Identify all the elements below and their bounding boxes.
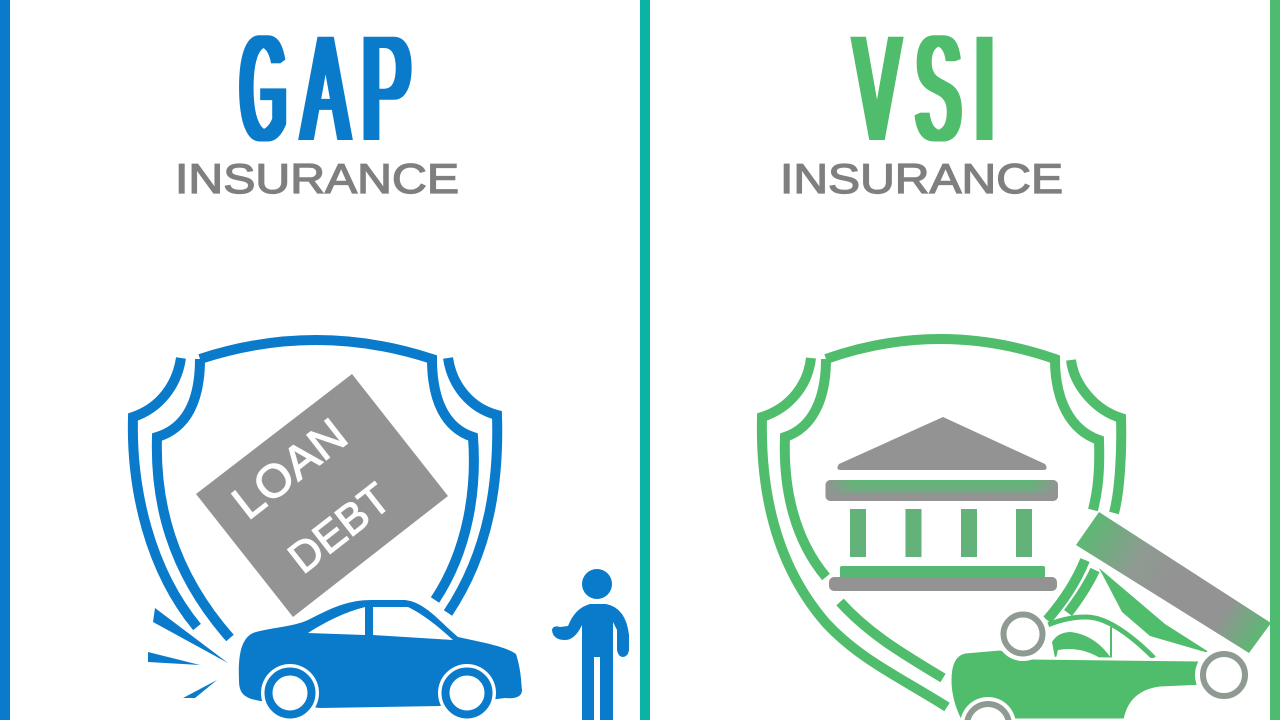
heading: VSI: I <box>974 4 995 172</box>
centre divider bar <box>640 0 650 720</box>
right edge bar <box>1270 0 1280 720</box>
icon: loan debt document <box>196 374 448 617</box>
icon: wrecked green car <box>950 512 1271 720</box>
heading: VSI: V <box>854 4 900 172</box>
icon: upper wheel <box>996 607 1050 661</box>
panel: GAP insurance <box>133 4 629 720</box>
subheading: insurance: INSURANCE <box>780 155 1063 202</box>
icon: impact lines <box>148 608 228 698</box>
heading: GAP: G <box>241 4 286 172</box>
label: debt: DEBT <box>280 474 400 583</box>
left edge bar <box>0 0 10 720</box>
icon: lower wheel <box>960 697 1016 720</box>
label: loan: LOAN <box>222 408 357 529</box>
icon: green shield <box>762 339 1121 707</box>
heading: VSI: S <box>916 4 960 172</box>
subheading: insurance: INSURANCE <box>175 155 459 202</box>
icon: person <box>552 569 629 720</box>
panel: VSI insurance <box>762 4 1271 720</box>
heading: GAP: A <box>302 4 348 172</box>
icon: blue car <box>239 600 522 720</box>
panel: GAP insurance: P <box>362 4 411 172</box>
icon: blue shield <box>133 340 497 638</box>
icon: bank building <box>826 417 1058 591</box>
icon: tilted grey panel <box>1076 512 1271 653</box>
icon: right wheel <box>1195 646 1253 704</box>
